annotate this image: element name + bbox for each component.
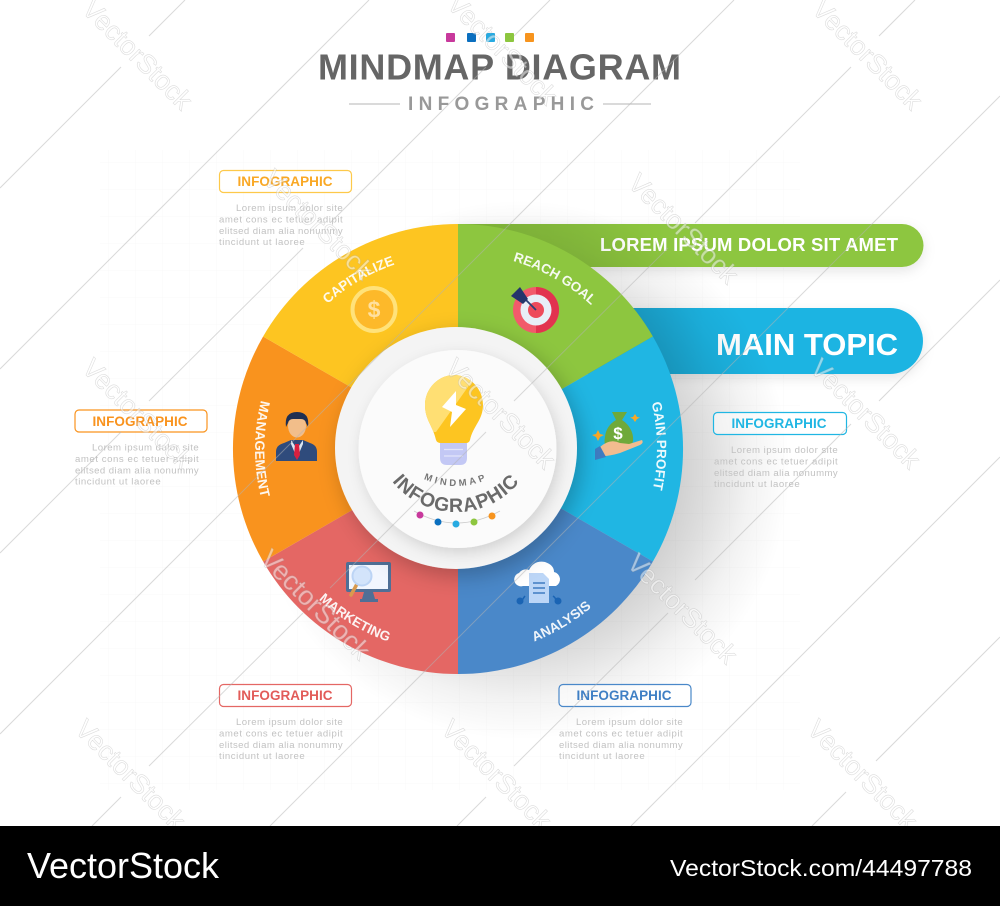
segment label: capitalize: CAPITALIZE [324,256,394,302]
callout: gain profit [714,412,846,490]
subheading: INFOGRAPHIC [408,94,594,115]
icon: coin: $ [368,296,381,322]
watermarks: VectorStock [439,353,562,475]
callout: capitalize: Lorem ipsum dolor site [236,203,343,214]
icon: cloud document [514,562,562,604]
callout: gain profit: elitsed diam alia nonummy [714,468,838,479]
watermarks: VectorStock [435,714,558,836]
segment label: gain profit: GAIN PROFIT [652,402,666,491]
callout: management: INFOGRAPHIC [92,414,188,429]
hub text: mindmap: MINDMAP [424,473,484,486]
segment: management [233,336,458,562]
icon: light bulb [425,375,483,465]
callout: management: tincidunt ut laoree [75,476,161,488]
heading: MINDMAP DIAGRAM [318,46,681,88]
callout: capitalize [219,170,352,248]
callout: marketing: amet cons ec tetuer adipit [219,728,343,740]
watermarks: VectorStock [257,164,380,286]
blue banner: main topic [560,308,923,374]
segment label: management: MANAGEMENT [255,401,270,496]
callout: capitalize: elitsed diam alia nonummy [219,226,343,237]
callout: gain profit: Lorem ipsum dolor site [731,445,838,456]
callout: capitalize: tincidunt ut laoree [219,237,305,248]
callout: gain profit: tincidunt ut laoree [714,479,800,490]
banner text: LOREM IPSUM DOLOR SIT AMET [600,234,899,255]
callout: gain profit: INFOGRAPHIC [732,416,827,431]
segment: gain profit [458,336,683,562]
watermarks: VectorStock [801,714,924,836]
callout: analysis [559,684,691,762]
icon: target with dart [511,287,559,333]
icon: money bag in hand: $ [613,424,623,443]
callout: management: amet cons ec tetuer adipit [75,454,199,465]
callout: marketing: INFOGRAPHIC [238,688,333,703]
callout: analysis: Lorem ipsum dolor site [576,717,683,728]
watermarks: VectorStock [621,548,744,670]
callout: management: elitsed diam alia nonummy [75,466,199,476]
watermarks: VectorStock [76,353,199,475]
main topic text: MAIN TOPIC [716,327,898,362]
segment: capitalize [263,224,458,449]
callout: marketing [219,684,352,762]
callout: marketing: tincidunt ut laoree [219,751,305,762]
colour squares [446,33,534,42]
green banner [458,224,924,267]
footer bar [0,826,1000,906]
callout: analysis: elitsed diam alia nonummy [559,740,683,751]
icon: coin [352,288,396,331]
icon: businessman [276,412,317,461]
callout: capitalize: INFOGRAPHIC [238,174,333,189]
callout: marketing: elitsed diam alia nonummy [219,740,343,751]
callout: gain profit: amet cons ec tetuer adipit [714,456,838,468]
segment label: marketing: MARKETING [319,593,390,640]
callout: management [75,410,207,488]
hub dots [414,511,500,528]
watermarks [69,0,929,836]
watermarks: VectorStock [69,714,192,836]
title block [318,33,681,115]
icon: monitor with magnifier [346,562,391,602]
segment label: reach goal: REACH GOAL [514,252,594,305]
callout: capitalize: amet cons ec tetuer adipit [219,214,343,226]
callout: marketing: Lorem ipsum dolor site [236,717,343,728]
footer logo: VectorStock [27,845,220,886]
callout: analysis: INFOGRAPHIC [576,688,672,703]
central hub [329,323,592,586]
watermarks: VectorStock [254,544,377,666]
segment: marketing [263,449,458,674]
segment: reach goal [458,224,653,449]
segment: analysis [458,449,653,674]
callout: management: Lorem ipsum dolor site [92,442,199,454]
watermarks: VectorStock [804,353,927,475]
callout: analysis: amet cons ec tetuer adipit [559,728,683,740]
segmented wheel [233,224,683,674]
callout: analysis: tincidunt ut laoree [559,751,645,762]
watermarks: VectorStock [622,168,745,290]
hub text: infographic: INFOGRAPHIC [392,474,518,512]
footer url: VectorStock.com/44497788 [670,855,972,881]
icon: money bag in hand [592,412,643,460]
segment label: analysis: ANALYSIS [534,602,590,642]
